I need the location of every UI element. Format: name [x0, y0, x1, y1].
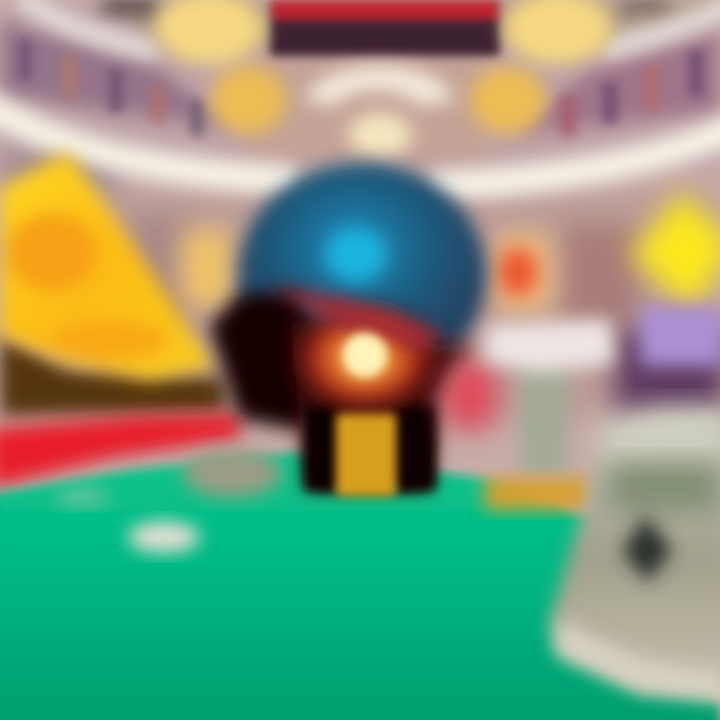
upper balcony seating: [0, 0, 720, 170]
seat stripes: [18, 40, 704, 137]
note band shading: [610, 465, 720, 510]
yellow diamond sign: [630, 192, 720, 312]
dark centre mass: [290, 320, 470, 490]
stack top: [590, 408, 720, 458]
right podium: [442, 320, 614, 510]
stack body: [550, 420, 720, 700]
black left mass: [210, 292, 330, 430]
faint chip: [54, 487, 110, 507]
top banner: [270, 0, 500, 56]
podium top: [484, 320, 614, 372]
pale lower edge: [556, 620, 720, 700]
lavender face: [640, 306, 720, 366]
dark plum backing: [615, 330, 720, 415]
purple sign panel: [615, 306, 720, 415]
dark silhouette with glowing core: [210, 285, 470, 496]
red side accent: [442, 359, 498, 431]
chandeliers: [155, 0, 612, 134]
grey chip stack: [182, 449, 282, 497]
banknote stack: [550, 408, 720, 700]
red glow: [287, 298, 443, 418]
gold door: [336, 414, 396, 496]
chips on the table: [54, 449, 282, 553]
white chip: [128, 521, 200, 553]
red carpet: [0, 414, 240, 488]
black legs: [305, 405, 435, 492]
white hot centre: [343, 333, 387, 377]
white curved balcony rails: [0, 0, 720, 186]
wall lanterns: [182, 230, 552, 312]
central white arch: [305, 66, 455, 157]
gold pile on the left: [0, 152, 214, 380]
red lantern glow: [498, 248, 538, 296]
gold base: [484, 478, 592, 510]
red upper edge: [268, 285, 445, 350]
dark base below gold pile: [0, 335, 225, 416]
column: [520, 360, 568, 475]
dark emblem: [622, 515, 672, 582]
blue globe: [238, 163, 486, 387]
green felt table: [0, 452, 720, 720]
lower wall: [0, 150, 720, 425]
